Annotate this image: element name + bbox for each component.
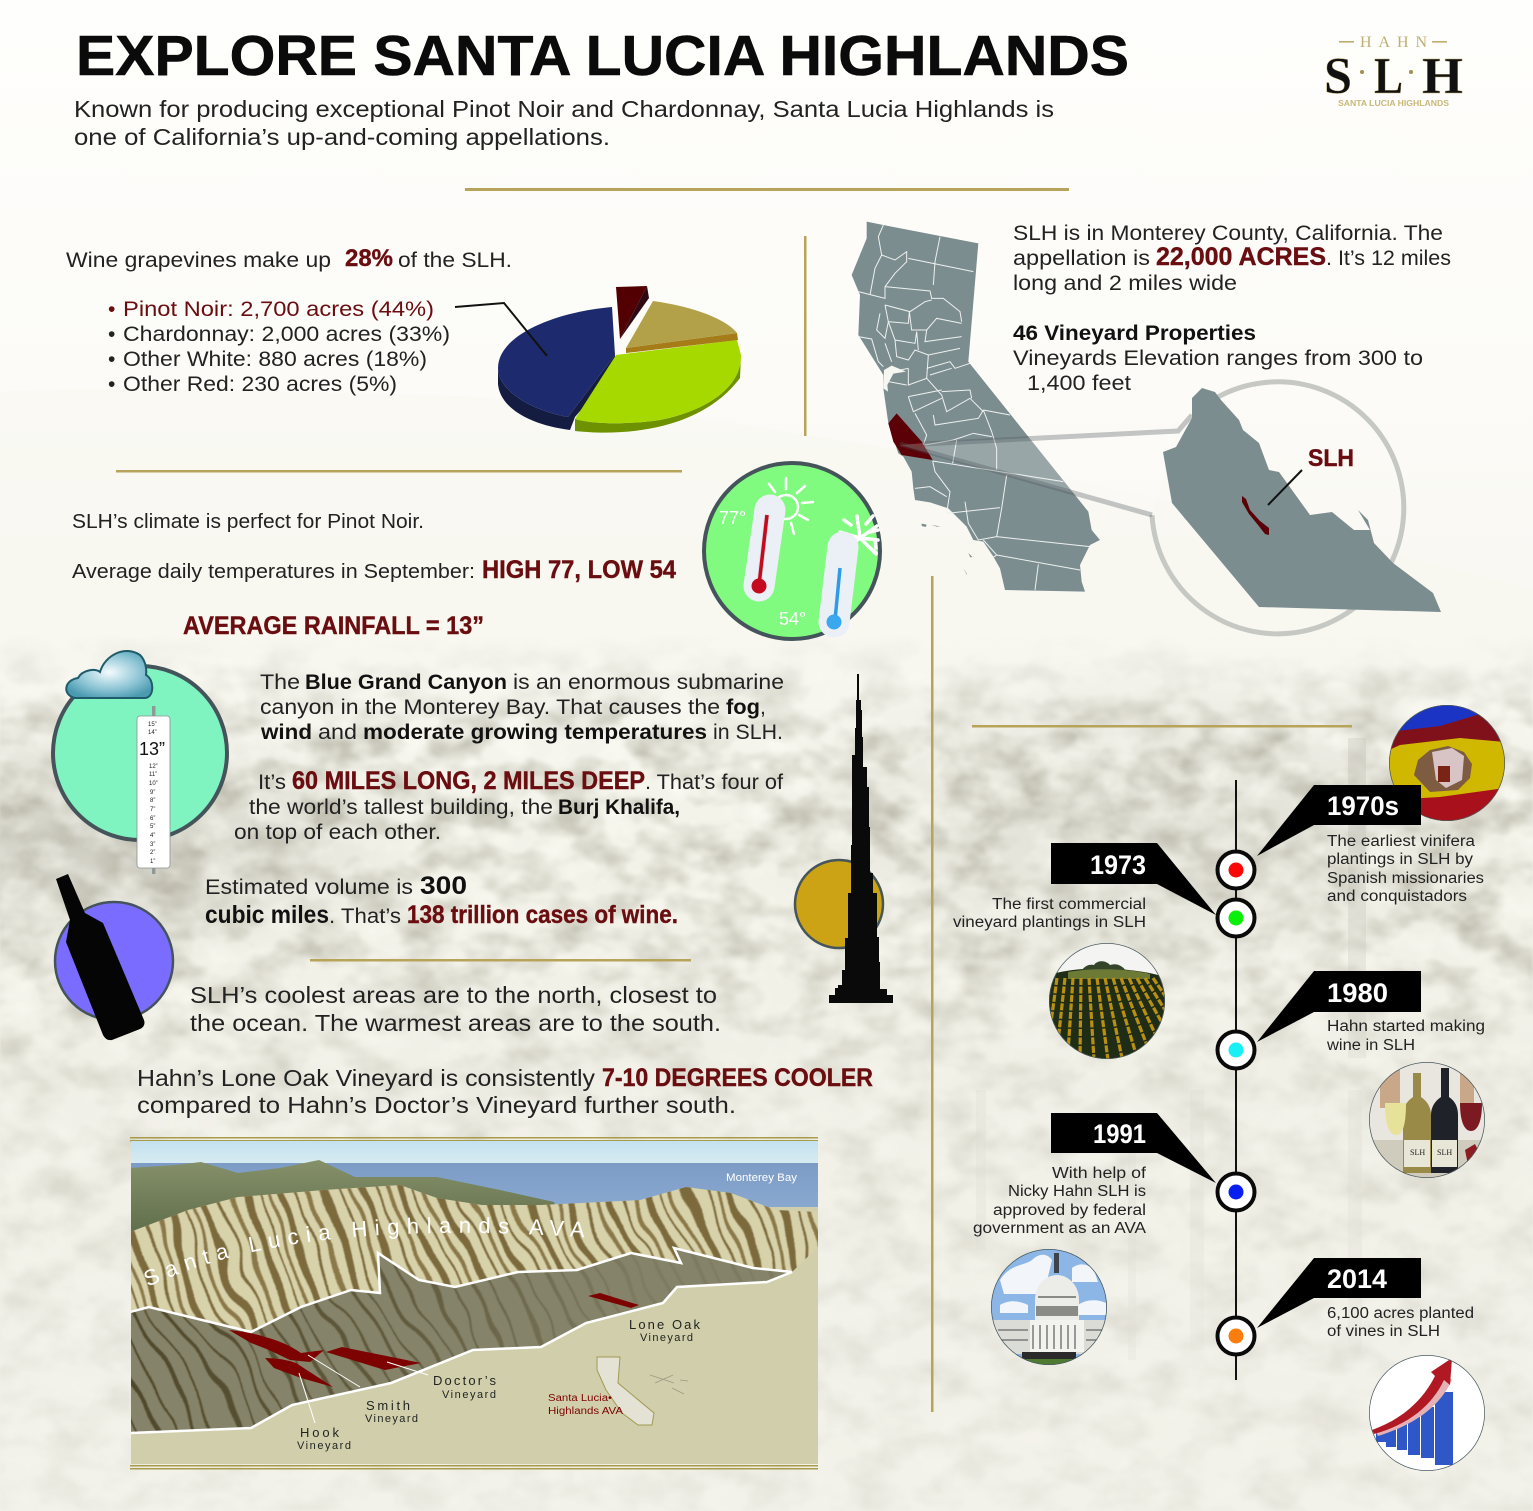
marker: 1980 [1218, 1032, 1254, 1068]
icon: rain gauge: 5” [150, 824, 155, 830]
photo: Spanish flag [1389, 705, 1505, 822]
marker: 1970s [1218, 852, 1254, 888]
climate text: HIGH 77, LOW 54 [482, 556, 676, 584]
zoomed Monterey County map [1163, 388, 1441, 612]
climate text: AVERAGE RAINFALL = 13” [183, 612, 484, 640]
temperature text [137, 982, 873, 1118]
icon: rain gauge: 10” [149, 781, 158, 787]
timeline entry: 1970s: The earliest vinifera [1327, 833, 1475, 850]
background: faded vineyard photo [0, 444, 1533, 1511]
icon: Burj Khalifa silhouette [795, 674, 893, 1003]
logo: Hahn SLH: HAHN [1360, 34, 1427, 51]
location text: 1,400 feet [1027, 372, 1131, 395]
photo: wine bottles [1369, 1062, 1485, 1180]
grape variety list: Chardonnay: 2,000 acres (33%) [123, 323, 450, 346]
map labels: Vineyard [640, 1332, 693, 1344]
temperature text: SLH’s coolest areas are to the north, closest to [190, 982, 717, 1008]
canyon text: The [260, 671, 300, 694]
timeline entry: 2014: 6,100 acres planted [1327, 1305, 1474, 1322]
location text: appellation is [1013, 247, 1150, 270]
timeline entry: 1991: approved by federal [993, 1202, 1146, 1219]
grape variety list: Other White: 880 acres (18%) [123, 348, 427, 371]
canyon text: in SLH. [713, 721, 783, 744]
intro text [74, 96, 1054, 150]
grape variety list [108, 298, 450, 396]
canyon text: the world’s tallest building, the [249, 796, 553, 819]
volume text: 138 trillion cases of wine. [407, 901, 678, 929]
timeline entry: 1980: wine in SLH [1326, 1037, 1415, 1054]
icon: rain gauge: 14” [148, 730, 157, 736]
timeline entry: 1980: Hahn started making [1327, 1018, 1485, 1035]
grapevine heading: 28% [345, 245, 393, 272]
grape variety list: • [108, 348, 115, 371]
icon: rain gauge: 1” [150, 859, 155, 865]
panel: grapevine share [66, 245, 741, 433]
icon: rain gauge: 7” [150, 807, 155, 813]
map labels: Hook [300, 1425, 340, 1440]
canyon text: and [318, 721, 357, 744]
canyon text [234, 671, 784, 844]
map: California with Monterey County [852, 222, 1100, 592]
location text: 22,000 ACRES [1156, 243, 1326, 271]
intro text: Known for producing exceptional Pinot Noir and Chardonnay, Santa Lucia Highlands is [74, 96, 1054, 122]
timeline entry: 1991: With help of [1052, 1165, 1147, 1182]
logo: Hahn SLH [1324, 34, 1463, 108]
logo: Hahn SLH: S [1324, 48, 1352, 105]
icon: rain gauge: 4” [150, 833, 155, 839]
canyon text: fog [726, 696, 760, 719]
canyon text: wind [260, 721, 312, 744]
magnifier callout [900, 382, 1441, 634]
icon: rain gauge: 3” [150, 842, 155, 848]
title: EXPLORE SANTA LUCIA HIGHLANDS [76, 24, 1129, 88]
map labels: Vineyard [442, 1389, 496, 1401]
photo: growth chart [1369, 1355, 1485, 1471]
icon: rain gauge: 11” [149, 772, 157, 778]
grapevine heading: Wine grapevines make up [66, 249, 331, 272]
map labels [144, 1172, 798, 1452]
climate text: SLH’s climate is perfect for Pinot Noir. [72, 511, 424, 533]
logo: Hahn SLH: H [1422, 48, 1463, 105]
canyon text: , [760, 696, 766, 719]
location text: 46 Vineyard Properties [1013, 322, 1256, 345]
grape variety list: Other Red: 230 acres (5%) [123, 373, 397, 396]
timeline entry: 1973: vineyard plantings in SLH [953, 914, 1146, 931]
temperature text: compared to Hahn’s Doctor’s Vineyard further south. [137, 1092, 736, 1118]
location text [1013, 222, 1451, 395]
timeline entry: 1973: The first commercial [992, 896, 1146, 913]
timeline entry: 1970s [1257, 785, 1484, 905]
canyon text: Blue Grand Canyon [305, 671, 507, 694]
icon: thermometers [704, 463, 880, 639]
zoomed Monterey County map: SLH [1308, 445, 1354, 472]
icon: rain gauge: 6” [150, 816, 155, 822]
map labels: Smith [366, 1398, 410, 1413]
map labels: Santa Lucia• [548, 1393, 613, 1404]
map labels: Highlands AVA [548, 1406, 623, 1417]
climate text: Average daily temperatures in September: [72, 561, 475, 583]
canyon text: moderate growing temperatures [363, 721, 707, 744]
timeline entry: 1991: Nicky Hahn SLH is [1008, 1183, 1146, 1200]
grapevine heading [66, 245, 512, 272]
timeline entry: 1970s: plantings in SLH by [1327, 851, 1473, 868]
location text: long and 2 miles wide [1013, 272, 1237, 295]
icon: rain gauge [53, 651, 227, 874]
timeline entry: 1970s: 1970s [1327, 791, 1399, 821]
volume text [205, 872, 678, 929]
canyon text: 60 MILES LONG, 2 MILES DEEP [292, 767, 645, 795]
timeline entry: 1973 [953, 843, 1216, 931]
vineyard relief map [130, 1137, 818, 1470]
timeline [1218, 780, 1254, 1380]
volume text: cubic miles [205, 901, 329, 929]
icon: rain gauge: 12” [149, 764, 158, 770]
photo: vineyard rows [1049, 943, 1175, 1060]
location text: SLH is in Monterey County, California. The [1013, 222, 1443, 245]
grape variety list: • [108, 373, 115, 396]
canyon text: Burj Khalifa, [558, 796, 680, 819]
marker: 1991 [1218, 1174, 1254, 1210]
climate text [72, 511, 676, 640]
map labels: Lone Oak [629, 1317, 700, 1332]
volume text: 300 [420, 872, 467, 900]
temperature text: 7-10 DEGREES COOLER [602, 1064, 873, 1092]
icon: thermometers: 77° [719, 508, 746, 528]
timeline entry: 1980 [1257, 971, 1485, 1054]
timeline entry: 1970s: Spanish missionaries [1327, 870, 1484, 887]
pie chart: grape varieties [455, 286, 741, 433]
timeline entry: 1973: 1973 [1090, 850, 1146, 880]
canyon text: on top of each other. [234, 821, 441, 844]
icon: rain gauge: 8” [150, 798, 155, 804]
map labels: Monterey Bay [726, 1172, 798, 1184]
logo: Hahn SLH: L [1374, 48, 1403, 105]
icon: rain gauge: 13” [139, 739, 165, 759]
canyon text: . That’s four of [645, 771, 783, 794]
location text: Vineyards Elevation ranges from 300 to [1013, 347, 1423, 370]
timeline entry: 2014 [1257, 1258, 1474, 1340]
icon: rain gauge: 9” [150, 790, 155, 796]
logo: Hahn SLH: SANTA LUCIA HIGHLANDS [1338, 99, 1450, 108]
map labels: Santa Lucia Highlands AVA [144, 1217, 584, 1285]
temperature text: Hahn’s Lone Oak Vineyard is consistently [137, 1065, 596, 1091]
temperature text: the ocean. The warmest areas are to the south. [190, 1010, 721, 1036]
grapevine heading: of the SLH. [398, 249, 512, 272]
timeline entry: 1970s: and conquistadors [1327, 888, 1467, 905]
location text: . It’s 12 miles [1326, 247, 1451, 270]
timeline entry: 2014: of vines in SLH [1327, 1323, 1440, 1340]
map labels: Doctor’s [433, 1373, 496, 1388]
marker: 1973 [1218, 900, 1254, 936]
volume text: . That’s [329, 905, 401, 928]
canyon text: canyon in the Monterey Bay. That causes the [260, 696, 720, 719]
timeline entry: 1991: government as an AVA [973, 1220, 1147, 1237]
photo: wine bottles: SLH [1410, 1148, 1425, 1157]
photo: US Capitol [991, 1249, 1107, 1365]
timeline entry: 1991: 1991 [1093, 1119, 1146, 1149]
timeline entry: 1980: 1980 [1327, 978, 1388, 1008]
map labels: Vineyard [365, 1413, 418, 1425]
intro text: one of California’s up-and-coming appellations. [74, 124, 610, 150]
grape variety list: • [108, 298, 115, 321]
icon: rain gauge: 2” [150, 850, 155, 856]
canyon text: is an enormous submarine [513, 671, 784, 694]
canyon text: It’s [258, 771, 286, 794]
map labels: Vineyard [297, 1440, 351, 1452]
marker: 2014 [1218, 1318, 1254, 1354]
photo: wine bottles: SLH [1437, 1148, 1452, 1157]
icon: thermometers: 54° [779, 609, 806, 629]
icon: rain gauge: 15” [148, 722, 157, 728]
grape variety list: • [108, 323, 115, 346]
grape variety list: Pinot Noir: 2,700 acres (44%) [123, 298, 434, 321]
timeline entry: 2014: 2014 [1327, 1264, 1387, 1294]
icon: wine bottle [55, 874, 173, 1040]
timeline entry: 1991 [973, 1113, 1216, 1237]
volume text: Estimated volume is [205, 876, 413, 899]
